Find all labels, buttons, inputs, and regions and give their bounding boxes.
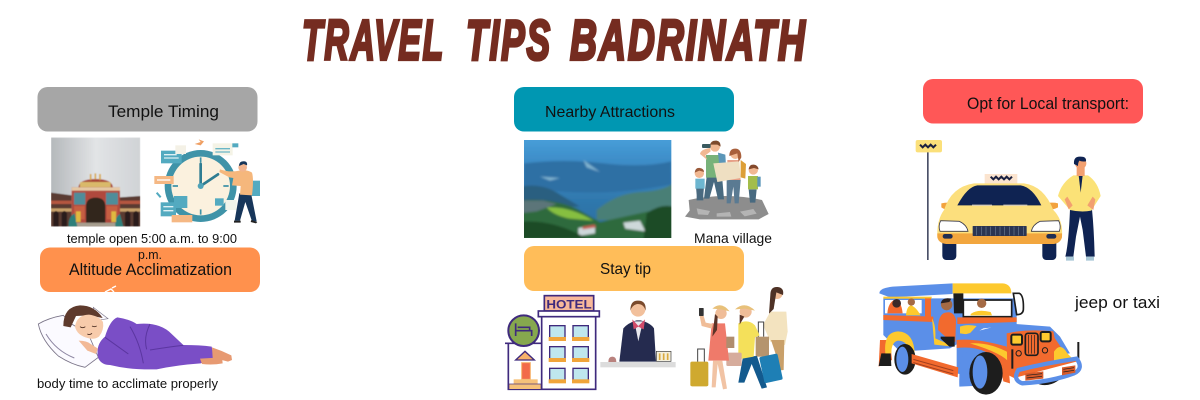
- photo: mountain valley: [524, 140, 672, 238]
- heading: stay tip: Stay tip: [600, 261, 651, 278]
- caption continuation: p.m.: p.m.: [138, 247, 162, 262]
- panel: temple timing: [38, 87, 260, 227]
- heading box: altitude: [40, 248, 260, 292]
- heading: nearby attractions: Nearby Attractions: [545, 104, 675, 121]
- icon: small white arrow: [105, 286, 116, 292]
- heading box: nearby attractions: [514, 87, 734, 132]
- icon: hotel building: [505, 296, 599, 389]
- heading box: stay tip: [524, 246, 744, 291]
- title: [302, 8, 807, 72]
- heading: temple timing: Temple Timing: [108, 102, 219, 121]
- panel: stay tip: [505, 246, 788, 389]
- icon: sleeping woman: [38, 305, 232, 369]
- heading: local transport: Opt for Local transport:: [967, 95, 1129, 113]
- photo: Badrinath temple: [51, 137, 140, 227]
- heading: altitude: Altitude Acclimatization: [69, 261, 232, 279]
- icon: hotel receptionist: [600, 301, 676, 367]
- title word: TRAVEL: TRAVEL: [302, 8, 445, 72]
- heading box: local transport: [923, 79, 1143, 124]
- icon: colourful jeepney: [879, 283, 1080, 395]
- panel: nearby attractions: [514, 87, 772, 246]
- icon: taxi, stand and driver: [916, 140, 1101, 261]
- title word: BADRINATH: BADRINATH: [570, 8, 807, 72]
- panel: altitude acclimatization: [38, 247, 260, 369]
- caption: temple open hours: temple open 5:00 a.m. to 9:00: [67, 231, 237, 246]
- caption: jeep or taxi: jeep or taxi: [1074, 293, 1160, 312]
- icon: clock with man: [154, 139, 260, 223]
- title word: TIPS: TIPS: [466, 8, 552, 72]
- caption: Mana village: Mana village: [694, 231, 772, 246]
- panel: local transport: [879, 79, 1160, 395]
- caption: acclimate: body time to acclimate properly: [37, 376, 218, 391]
- icon: family with map on rock: [685, 141, 769, 219]
- icon: hotel building: HOTEL: [546, 298, 592, 312]
- icon: women travellers with luggage: [690, 287, 788, 389]
- heading box: temple timing: [38, 87, 258, 132]
